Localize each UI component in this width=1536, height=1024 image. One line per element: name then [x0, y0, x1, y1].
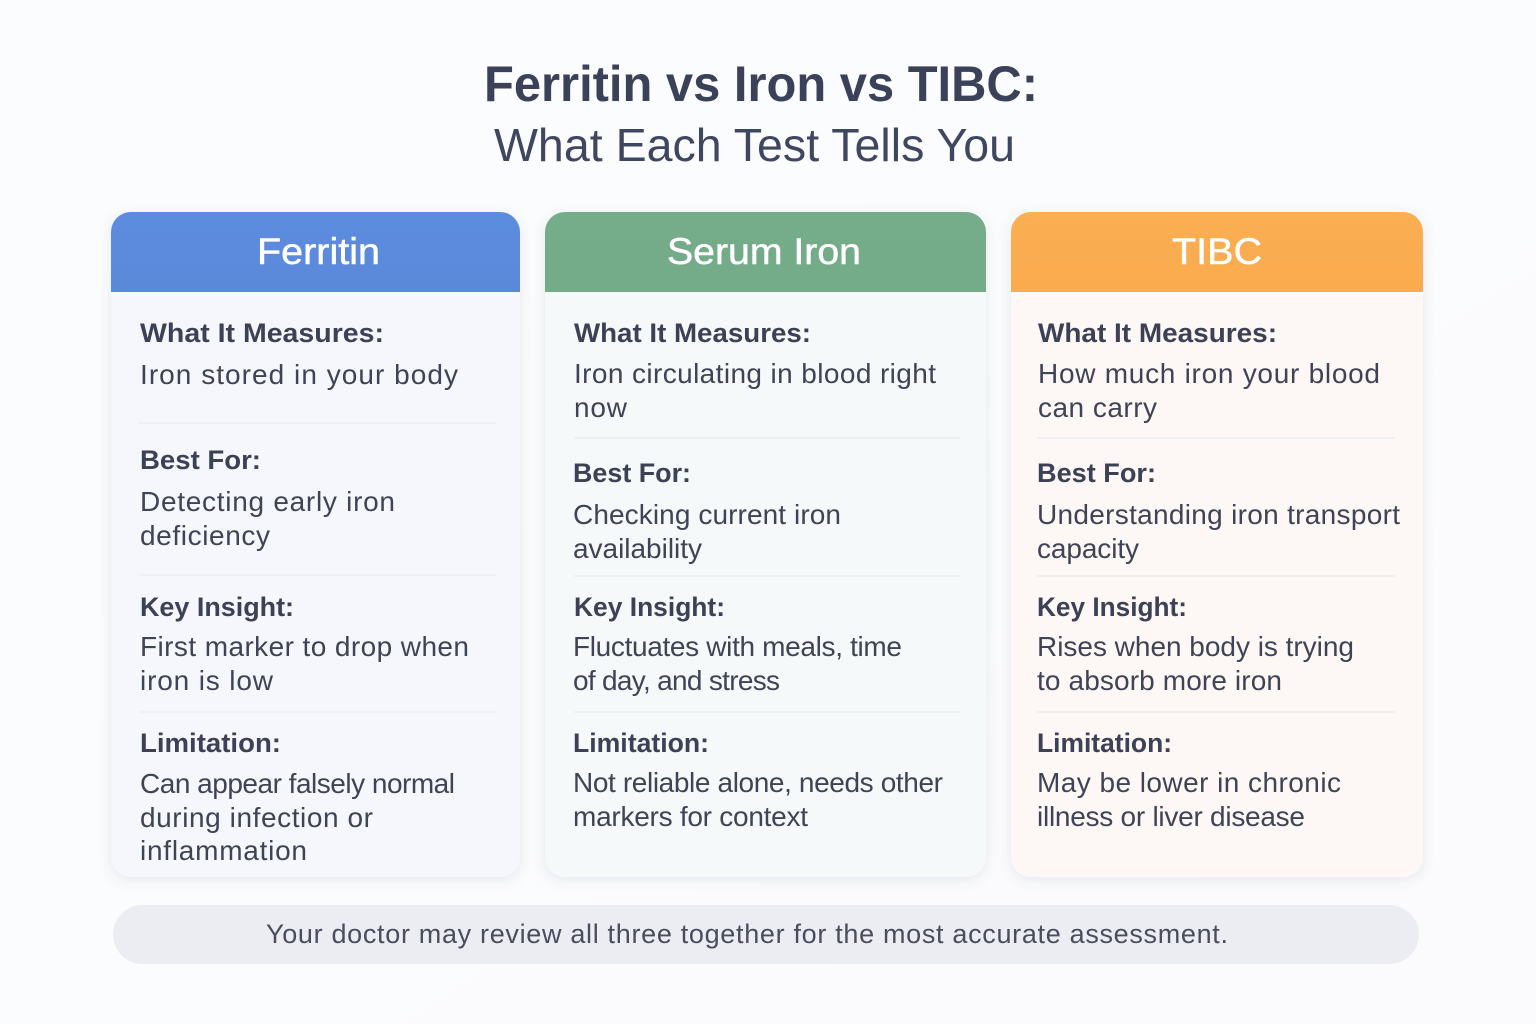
section: best for — [140, 445, 395, 551]
title: Ferritin vs Iron vs TIBC: — [484, 56, 1038, 112]
section: key insight: iron is low — [140, 665, 274, 696]
section: key insight: to absorb more iron — [1037, 665, 1282, 696]
section: what it measures: Iron stored in your body — [140, 359, 458, 390]
section: limitation: Limitation: — [140, 728, 281, 758]
section: limitation: Limitation: — [573, 728, 709, 758]
section: what it measures: What It Measures: — [1038, 318, 1277, 348]
section: what it measures: How much iron your blood — [1038, 358, 1380, 389]
section: limitation — [1037, 728, 1341, 832]
section: key insight: Key Insight: — [574, 592, 725, 622]
panel: TIBC — [1011, 212, 1423, 877]
section: limitation — [140, 728, 455, 866]
section: key insight — [573, 592, 902, 696]
section: limitation: May be lower in chronic — [1037, 767, 1341, 798]
section: what it measures: Iron circulating in blood right — [574, 358, 936, 389]
section: what it measures: What It Measures: — [140, 318, 384, 348]
section: what it measures — [1038, 318, 1380, 423]
callout: footer note — [113, 905, 1419, 964]
section: limitation: Not reliable alone, needs other — [573, 767, 943, 798]
section: best for: Understanding iron transport — [1037, 499, 1400, 530]
section: what it measures: What It Measures: — [574, 318, 811, 348]
section: limitation: illness or liver disease — [1037, 801, 1305, 832]
section: key insight — [140, 592, 469, 696]
section: key insight: First marker to drop when — [140, 631, 469, 662]
section: limitation: Can appear falsely normal — [140, 768, 455, 799]
header: Serum Iron — [545, 212, 986, 292]
section: best for — [1037, 458, 1400, 564]
header: Ferritin — [111, 212, 520, 292]
section: best for: Best For: — [140, 445, 261, 475]
section: best for: Detecting early iron — [140, 486, 395, 517]
section: best for: Best For: — [1037, 458, 1156, 488]
section: best for: Checking current iron — [573, 499, 841, 530]
section: key insight: Key Insight: — [1037, 592, 1187, 622]
section: key insight: Key Insight: — [140, 592, 294, 622]
section: limitation: during infection or — [140, 802, 373, 833]
panel: Ferritin — [111, 212, 520, 877]
subtitle: What Each Test Tells You — [494, 119, 1015, 171]
section: key insight: Rises when body is trying — [1037, 631, 1354, 662]
section: what it measures: can carry — [1038, 392, 1157, 423]
section: limitation: markers for context — [573, 801, 808, 832]
section: best for: deficiency — [140, 520, 270, 551]
header: TIBC — [1011, 212, 1423, 292]
section: best for: availability — [573, 533, 702, 564]
section: best for: capacity — [1037, 533, 1139, 564]
section: key insight: Fluctuates with meals, time — [573, 631, 902, 662]
section: limitation — [573, 728, 943, 832]
section: what it measures — [140, 318, 458, 390]
section: limitation: Limitation: — [1037, 728, 1172, 758]
callout: footer note: Your doctor may review all three together for the most accurate assessment. — [266, 919, 1228, 949]
title — [484, 56, 1038, 171]
header: Ferritin: Ferritin — [257, 231, 380, 272]
section: best for — [573, 458, 841, 564]
panel: Serum Iron — [545, 212, 986, 877]
section: what it measures — [574, 318, 936, 423]
section: key insight — [1037, 592, 1354, 696]
section: best for: Best For: — [573, 458, 691, 488]
section: what it measures: now — [574, 392, 628, 423]
header: TIBC: TIBC — [1172, 231, 1262, 272]
section: key insight: of day, and stress — [573, 665, 780, 696]
header: Serum Iron: Serum Iron — [667, 231, 861, 272]
section: limitation: inflammation — [140, 835, 307, 866]
